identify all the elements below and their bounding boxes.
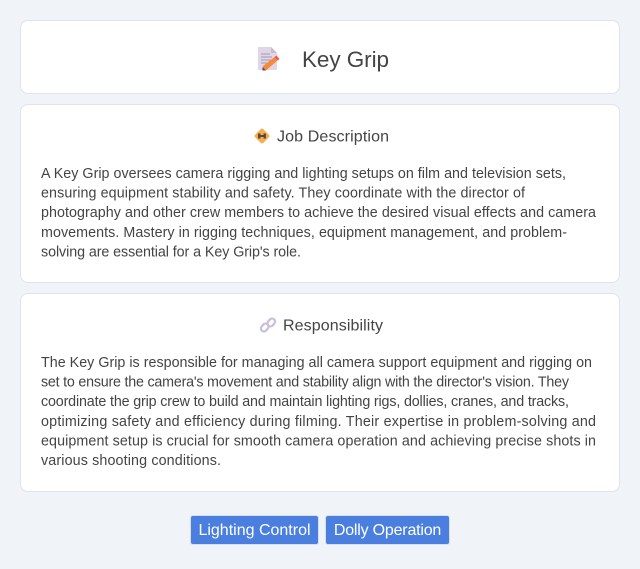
text: job description body xyxy=(41,166,596,260)
text: responsibility body: coordinate the grip crew to build and maintain lighting rigs, dollies, cranes, and tracks, xyxy=(41,394,569,410)
text: responsibility body: equipment setup is crucial for smooth camera operation and achieving precise shots in xyxy=(41,433,596,449)
panel: job description xyxy=(20,104,620,283)
icon: memo with pencil xyxy=(258,47,280,70)
tag: Dolly Operation xyxy=(325,515,450,545)
text: job description body: ensuring equipment stability and safety. They coordinate with the director of xyxy=(41,186,525,202)
text: job description body: A Key Grip oversees camera rigging and lighting setups on film and television sets, xyxy=(41,166,566,182)
heading: Job Description: Job Description xyxy=(277,128,389,146)
text: responsibility body: various shooting conditions. xyxy=(41,453,221,469)
panel: title xyxy=(20,20,620,94)
heading: Key Grip: Key Grip xyxy=(302,47,389,72)
text: job description body: photography and other crew members to achieve the desired visual effects and camera xyxy=(41,205,596,221)
icon: link xyxy=(260,318,276,332)
text: responsibility body: The Key Grip is responsible for managing all camera support equipment and rigging on xyxy=(41,355,592,371)
text: responsibility body xyxy=(41,355,596,469)
panel: responsibility xyxy=(20,293,620,492)
icon: construction diamond xyxy=(254,128,270,144)
text: responsibility body: set to ensure the camera's movement and stability align with the director's vision. They xyxy=(41,375,570,391)
tag: Lighting Control xyxy=(190,515,319,545)
text: job description body: solving are essential for a Key Grip's role. xyxy=(41,244,301,260)
heading: Responsibility: Responsibility xyxy=(283,318,383,334)
text: responsibility body: optimizing safety and efficiency during filming. Their expertise in problem-solving and xyxy=(41,414,596,430)
tag: Dolly Operation: Dolly Operation xyxy=(334,522,441,539)
tag: Lighting Control: Lighting Control xyxy=(198,522,311,539)
text: job description body: movements. Mastery in rigging techniques, equipment management, and problem- xyxy=(41,225,567,241)
